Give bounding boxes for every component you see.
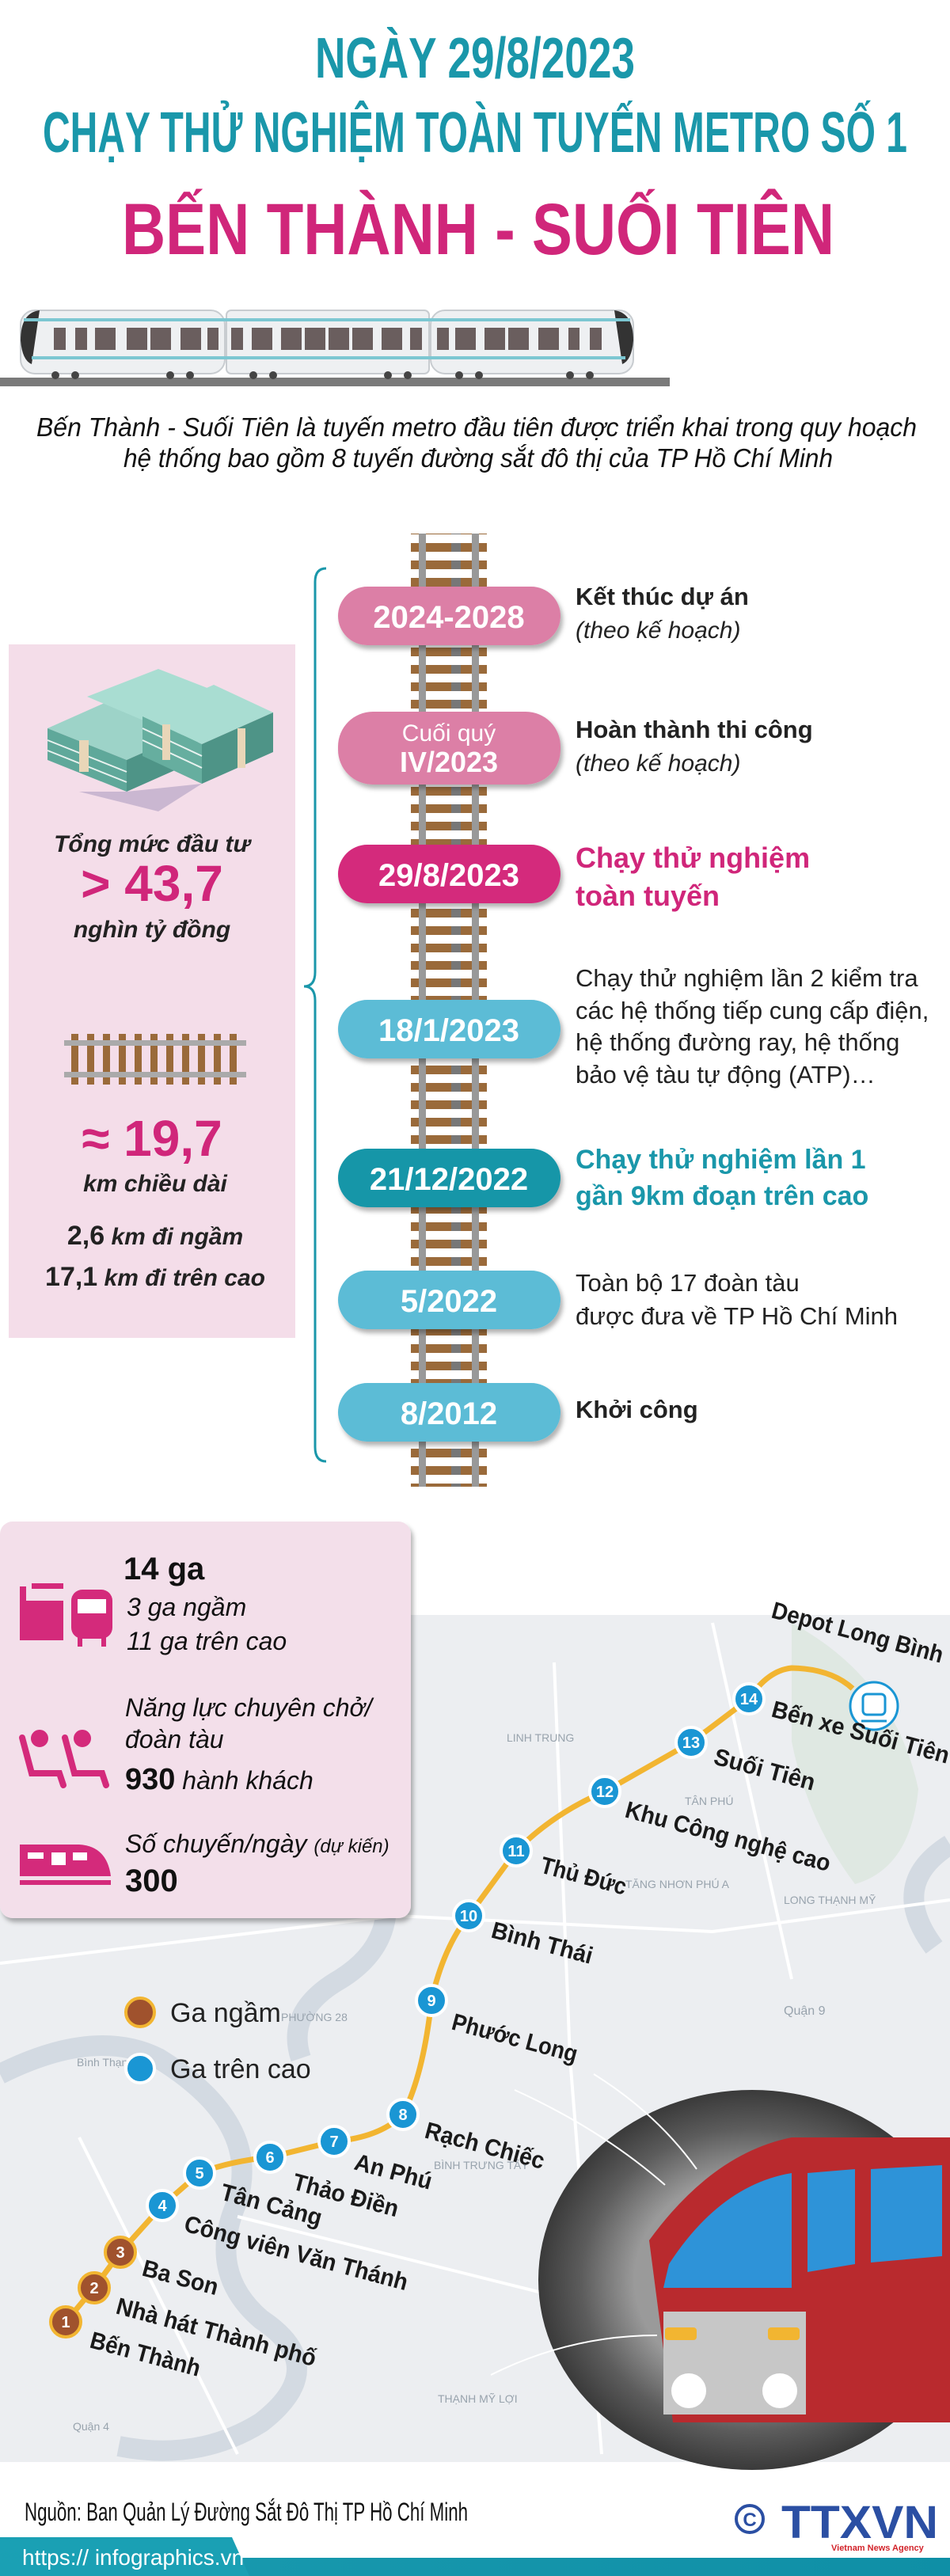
subtitle: hệ thống bao gồm 8 tuyến đường sắt đô thị của TP Hồ Chí Minh	[124, 443, 833, 473]
timeline: 2024-2028: 2024-2028	[373, 600, 525, 635]
subtitle	[36, 412, 917, 473]
timeline: 5/2022: 5/2022	[401, 1284, 497, 1319]
icon: rail segment	[64, 1034, 246, 1085]
map background: Quận 9	[784, 2004, 826, 2018]
map background: LONG THẠNH MỸ	[784, 1894, 876, 1906]
map background: TĂNG NHƠN PHÚ A	[625, 1878, 730, 1890]
timeline: 18/1/2023: bảo vệ tàu tự động (ATP)…	[576, 1061, 876, 1089]
timeline: 2024-2028: Kết thúc dự án	[576, 583, 749, 610]
logo: TTXVN	[736, 2497, 938, 2553]
map: metro route: 2	[89, 2280, 99, 2297]
map: metro route: 14	[740, 1691, 758, 1708]
icon: depot	[850, 1682, 898, 1730]
panel: station stats: 11 ga trên cao	[127, 1627, 287, 1655]
panel: key figures	[9, 644, 295, 1338]
brace	[304, 568, 326, 1461]
timeline: 18/1/2023	[338, 964, 929, 1089]
timeline: 29/8/2023: Chạy thử nghiệm	[576, 842, 810, 874]
map: station labels: Nhà hát Thành phố	[113, 2293, 319, 2372]
footer bar: https:// infographics.vn	[22, 2545, 244, 2570]
timeline: 5/2022	[338, 1269, 898, 1330]
map: metro route: 4	[158, 2198, 167, 2215]
timeline: 29/8/2023	[338, 842, 810, 912]
timeline: 5/2022: Toàn bộ 17 đoàn tàu	[576, 1269, 800, 1297]
text: investment: Tổng mức đầu tư	[54, 831, 252, 857]
map background: BÌNH TRƯNG TÂY	[434, 2159, 529, 2171]
timeline: Q4/2023: (theo kế hoạch)	[576, 750, 740, 777]
timeline: 21/12/2022: Chạy thử nghiệm lần 1	[576, 1145, 866, 1175]
map: metro route: 7	[329, 2133, 339, 2151]
map: station labels: Bến Thành	[87, 2327, 203, 2382]
panel: station stats: 300	[125, 1864, 178, 1898]
map: station labels: Suối Tiên	[711, 1744, 818, 1796]
map: metro route: 12	[596, 1784, 614, 1801]
panel: station stats: Năng lực chuyên chở/	[125, 1693, 374, 1722]
icon: seats	[22, 1733, 106, 1785]
text: length: 17,1 km đi trên cao	[45, 1262, 265, 1292]
legend: Ga trên cao	[170, 2054, 311, 2084]
title: NGÀY 29/8/2023	[315, 27, 635, 90]
timeline: 5/2022: được đưa về TP Hồ Chí Minh	[576, 1302, 898, 1330]
timeline: 21/12/2022: gần 9km đoạn trên cao	[576, 1181, 868, 1211]
legend: Ga ngầm	[170, 1998, 281, 2028]
map: metro route: 9	[427, 1993, 436, 2010]
timeline: 2024-2028: (theo kế hoạch)	[576, 617, 740, 644]
timeline: 18/1/2023: hệ thống đường ray, hệ thống	[576, 1028, 899, 1056]
title	[43, 27, 907, 270]
map background: Quận 4	[73, 2420, 109, 2433]
map: station labels: Khu Công nghệ cao	[622, 1797, 834, 1877]
source text: Nguồn: Ban Quản Lý Đường Sắt Đô Thị TP Hồ Chí Minh	[25, 2498, 468, 2526]
footer bar	[0, 2537, 950, 2576]
map: station labels: Công viên Văn Thánh	[181, 2211, 411, 2296]
map: station labels: Tân Cảng	[218, 2179, 325, 2232]
text: investment	[54, 831, 252, 943]
panel: station stats: đoàn tàu	[125, 1725, 224, 1753]
map: station labels	[87, 1598, 950, 2382]
text: length: km chiều dài	[83, 1171, 228, 1197]
text: investment: nghìn tỷ đồng	[74, 917, 230, 943]
text: length: ≈ 19,7	[82, 1110, 222, 1167]
map: metro route: 3	[116, 2244, 125, 2262]
map: metro route: 11	[507, 1843, 525, 1860]
map: metro route: 1	[61, 2314, 70, 2331]
logo: TTXVN: C	[743, 2510, 757, 2531]
map: station labels: Ba Son	[139, 2255, 221, 2301]
timeline: Q4/2023: Hoàn thành thi công	[576, 716, 813, 743]
timeline: 29/8/2023: 29/8/2023	[378, 858, 519, 893]
map background: PHƯỜNG 28	[281, 2011, 348, 2023]
map background: THẠNH MỸ LỢI	[438, 2392, 518, 2405]
timeline: 8/2012: Khởi công	[576, 1396, 698, 1423]
timeline: 21/12/2022: 21/12/2022	[370, 1162, 528, 1197]
timeline track	[411, 534, 487, 1487]
timeline: 8/2012: 8/2012	[401, 1396, 497, 1431]
map: station labels: Bình Thái	[488, 1917, 595, 1970]
panel: station stats: 3 ga ngầm	[127, 1593, 246, 1621]
logo: TTXVN: TTXVN	[781, 2497, 938, 2548]
text: length: 2,6 km đi ngầm	[67, 1221, 243, 1251]
map: metro route: 10	[460, 1908, 477, 1925]
map background: LINH TRUNG	[507, 1731, 574, 1744]
text: length	[45, 1110, 265, 1292]
map: station labels: Thảo Điền	[290, 2169, 401, 2222]
timeline: Q4/2023: Cuối quý	[402, 720, 496, 747]
legend	[126, 1998, 311, 2084]
subtitle: Bến Thành - Suối Tiên là tuyến metro đầu tiên được triển khai trong quy hoạch	[36, 412, 917, 442]
text: investment: > 43,7	[81, 855, 223, 912]
timeline: 21/12/2022	[338, 1145, 868, 1211]
map: metro route: 8	[398, 2107, 408, 2124]
map background	[0, 1615, 950, 2462]
icon: station	[20, 1583, 112, 1647]
panel: station stats: 14 ga	[124, 1552, 205, 1586]
icon: train	[20, 1845, 111, 1885]
timeline: 2024-2028	[338, 583, 749, 645]
map: station labels: Phước Long	[449, 2009, 580, 2068]
icon: money stacks	[48, 669, 273, 811]
map background: TÂN PHÚ	[685, 1795, 733, 1807]
panel: station stats	[0, 1522, 411, 1918]
map: station labels: Thủ Đức	[538, 1852, 629, 1900]
icon: train illustration	[0, 310, 670, 386]
map background: Bình Thạnh	[77, 2056, 134, 2069]
logo: TTXVN: Vietnam News Agency	[831, 2544, 925, 2553]
map: station labels: An Phú	[352, 2149, 435, 2195]
panel: station stats: 930 hành khách	[125, 1763, 314, 1796]
timeline: Q4/2023	[338, 712, 813, 785]
timeline: 18/1/2023: các hệ thống tiếp cung cấp điện,	[576, 997, 929, 1024]
map: metro route: 5	[195, 2165, 204, 2183]
timeline: 18/1/2023: Chạy thử nghiệm lần 2 kiểm tra	[576, 964, 918, 992]
map: metro route: 6	[265, 2149, 275, 2167]
timeline: Q4/2023: IV/2023	[400, 746, 498, 778]
panel: station stats: Số chuyến/ngày (dự kiến)	[125, 1829, 390, 1858]
map: metro route: 13	[682, 1734, 700, 1752]
timeline: 29/8/2023: toàn tuyến	[576, 880, 720, 912]
tunnel train illustration	[491, 2058, 950, 2470]
map: station labels: Rạch Chiếc	[422, 2118, 547, 2175]
timeline: 18/1/2023: 18/1/2023	[378, 1013, 519, 1048]
map: metro route	[51, 1668, 898, 2337]
timeline: 8/2012	[338, 1383, 698, 1442]
